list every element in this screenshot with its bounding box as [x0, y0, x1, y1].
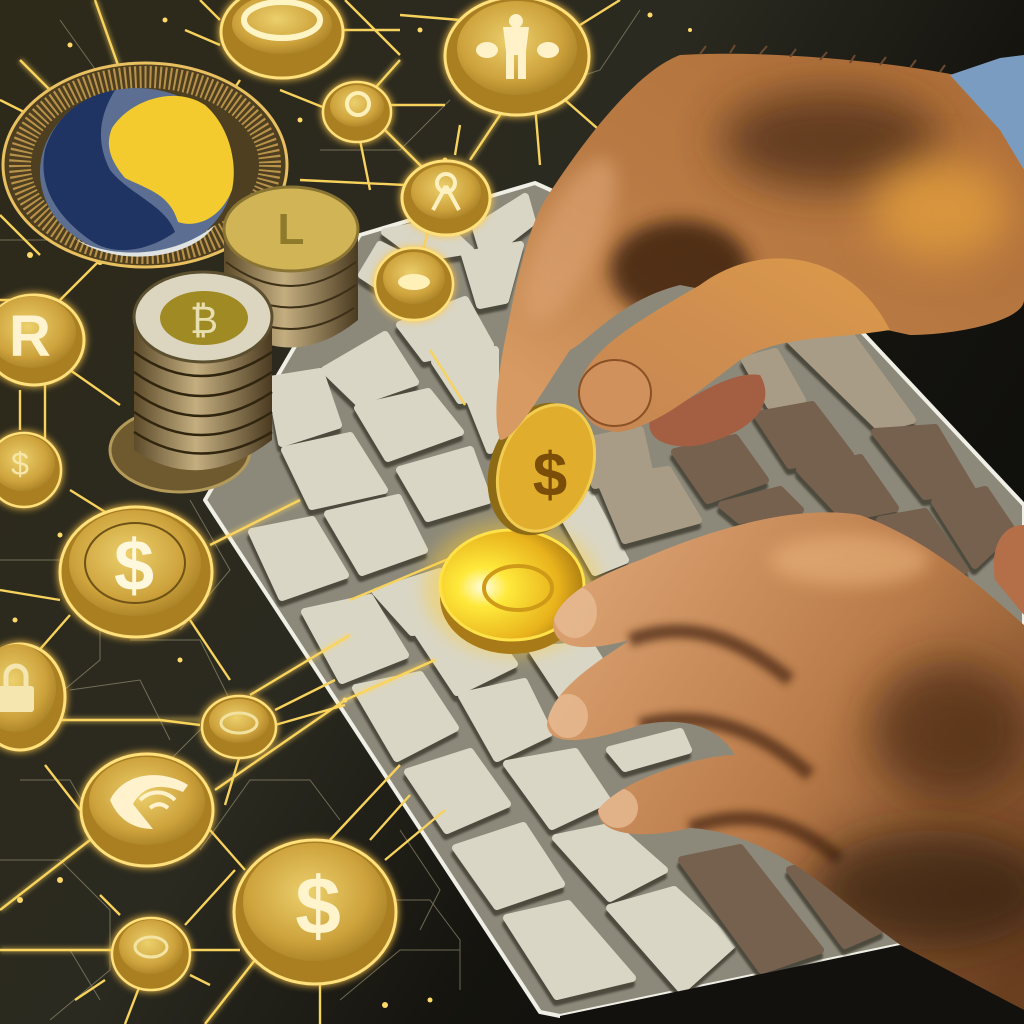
dark desk corner — [560, 945, 1024, 1024]
hand: lower — [547, 512, 1024, 1010]
shirt cuff — [950, 55, 1024, 170]
coin: left small — [0, 433, 61, 507]
coin: small Q — [323, 82, 391, 142]
coin: lock — [0, 644, 65, 750]
next finger at right edge — [994, 525, 1024, 615]
upper hand shading — [505, 90, 1010, 334]
coin: letter R: R — [9, 304, 51, 369]
lower hand palm and fingers — [547, 512, 1024, 1010]
coin: person — [445, 0, 589, 115]
keyboard body — [205, 183, 1024, 1016]
hand: upper — [496, 45, 1024, 446]
coin: small oval — [202, 696, 276, 758]
circuit traces — [0, 10, 640, 1020]
coin: shield bottom — [112, 918, 190, 990]
coin icons — [0, 0, 589, 990]
coin: letter R — [0, 295, 84, 385]
coin: dollar bottom: $ — [295, 861, 341, 952]
coin: wifi — [81, 754, 213, 866]
coin stack: front: ₿ — [190, 300, 218, 342]
falling coin: $ — [533, 441, 567, 510]
coin: dollar left: $ — [114, 526, 154, 606]
network nodes — [12, 12, 692, 1008]
coin stack: front — [110, 272, 272, 492]
thumb nail — [579, 360, 651, 426]
coin: dollar left — [60, 507, 212, 637]
network line glow — [0, 0, 510, 1024]
arm hair — [700, 45, 945, 72]
coin: left small: $ — [11, 446, 29, 482]
keyboard keys — [252, 197, 1012, 996]
coin: dollar bottom — [234, 840, 396, 984]
thumb — [578, 258, 890, 432]
coin: top link — [221, 0, 343, 78]
glowing coin on keyboard — [424, 520, 600, 656]
coin: tower — [402, 161, 490, 235]
coin stack: back — [224, 187, 358, 348]
coin stack: back: L — [278, 205, 304, 254]
network lines — [0, 0, 620, 1024]
upper hand back and index finger — [496, 54, 1024, 440]
curled fingers — [649, 374, 765, 446]
lower hand shading — [548, 534, 1024, 950]
coin: key top — [375, 248, 453, 320]
globe with halo — [3, 63, 287, 267]
falling coin — [470, 388, 611, 550]
